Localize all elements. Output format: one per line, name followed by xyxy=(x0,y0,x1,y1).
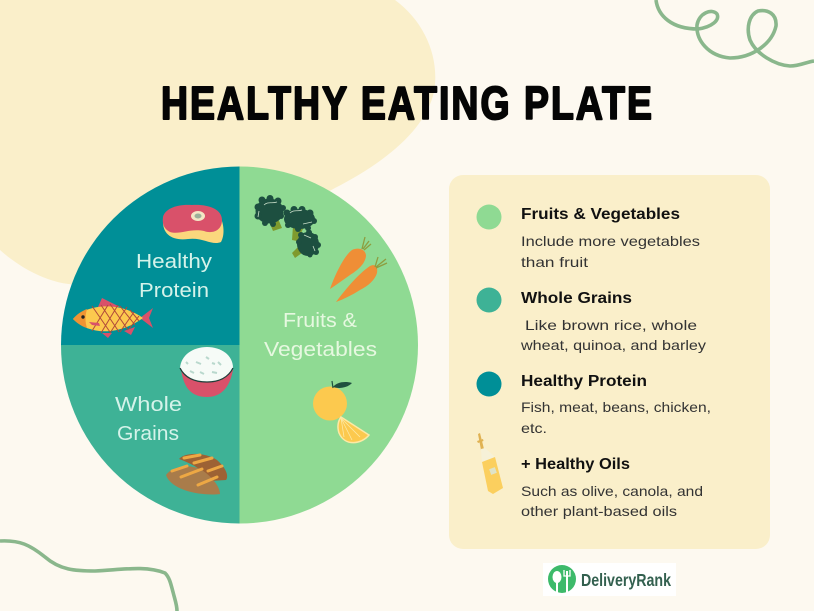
icon: logo mark xyxy=(548,565,576,593)
text: healthy oils: other plant-based oils xyxy=(521,503,677,519)
text: healthy oils: Such as olive, canola, and xyxy=(521,483,703,499)
label: fruits and vegetables xyxy=(264,310,377,361)
text: fruits and vegetables: than fruit xyxy=(521,254,588,270)
icon: broccoli xyxy=(254,195,321,258)
text: healthy oils xyxy=(521,483,703,519)
text: whole grains xyxy=(520,317,706,353)
label: healthy protein xyxy=(136,251,212,302)
plate chart xyxy=(61,166,418,524)
text: healthy protein: etc. xyxy=(521,420,547,436)
icon: steak xyxy=(163,205,224,243)
label: healthy protein: Protein xyxy=(139,280,209,302)
text: healthy protein xyxy=(521,399,711,436)
label: healthy protein: Healthy xyxy=(136,251,212,273)
logo: DeliveryRank xyxy=(543,563,676,596)
heading: whole grains: Whole Grains xyxy=(521,290,632,307)
squiggle: bottom left xyxy=(0,541,177,611)
label: fruits and vegetables: Vegetables xyxy=(264,339,377,361)
label: fruits and vegetables: Fruits & xyxy=(283,310,358,332)
legend marker: healthy protein xyxy=(476,372,502,396)
icon: bread xyxy=(166,454,227,494)
icon: orange slice xyxy=(338,417,369,443)
title: HEALTHY EATING PLATE xyxy=(161,77,654,129)
text: fruits and vegetables: Include more vegetables xyxy=(521,233,700,249)
segment: healthy protein xyxy=(61,166,240,345)
heading: fruits and vegetables: Fruits & Vegetables xyxy=(521,206,680,223)
label: whole grains xyxy=(115,394,182,445)
icon: oil bottle xyxy=(477,433,503,494)
icon: rice bowl xyxy=(180,347,233,397)
icon: orange xyxy=(313,381,352,420)
squiggle: top right xyxy=(656,0,814,66)
text: whole grains: wheat, quinoa, and barley xyxy=(520,337,706,353)
text: fruits and vegetables xyxy=(521,233,700,270)
label: whole grains: Whole xyxy=(115,394,182,416)
icon: fish xyxy=(73,298,153,338)
background blob xyxy=(0,0,435,285)
heading: healthy oils: + Healthy Oils xyxy=(521,456,630,473)
segment: fruits and vegetables xyxy=(240,166,418,524)
segment: whole grains xyxy=(61,345,240,524)
text: healthy protein: Fish, meat, beans, chicken, xyxy=(521,399,711,415)
heading: healthy protein: Healthy Protein xyxy=(521,373,647,390)
legend marker: whole grains xyxy=(476,288,502,312)
text: whole grains: Like brown rice, whole xyxy=(525,317,697,333)
panel: legend xyxy=(449,175,770,549)
legend marker: fruits and vegetables xyxy=(476,204,502,230)
logo wordmark: DeliveryRank xyxy=(581,570,671,590)
label: whole grains: Grains xyxy=(117,423,179,445)
icon: carrots xyxy=(330,237,387,302)
